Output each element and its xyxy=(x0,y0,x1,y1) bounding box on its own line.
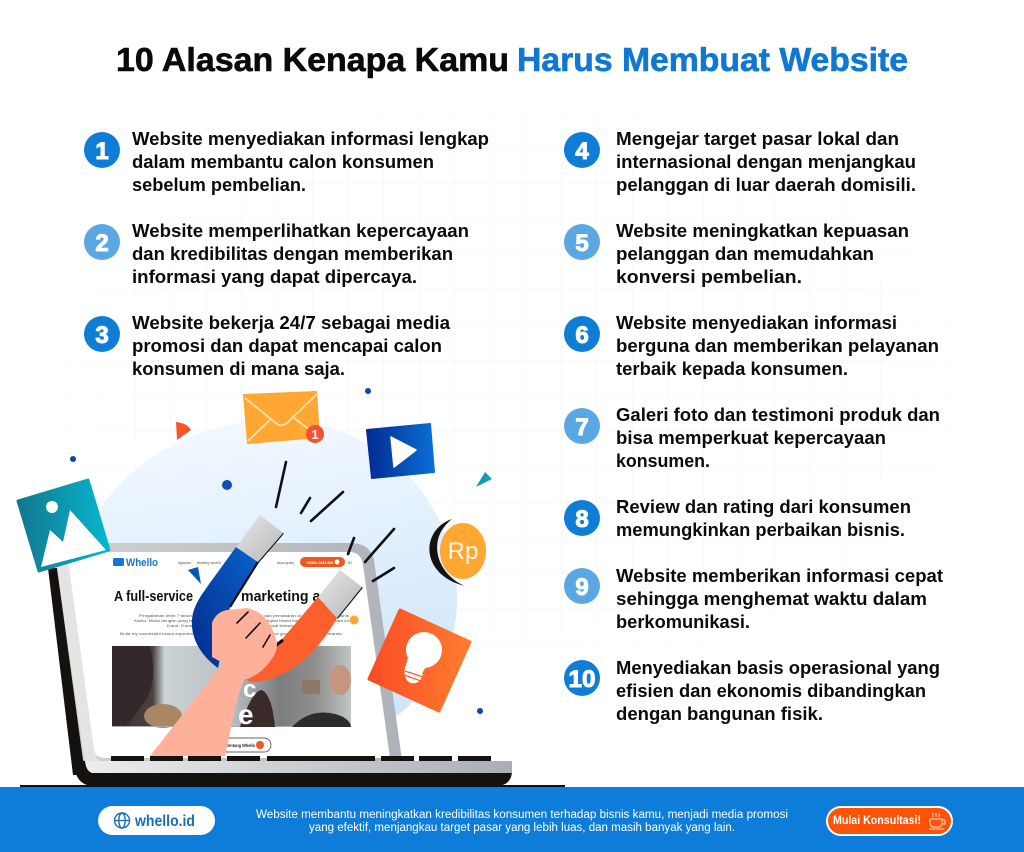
icon: envelope: 1 xyxy=(311,427,319,442)
reason 8: Review dan rating dari konsumen xyxy=(616,497,911,517)
website navigation: baca gratis xyxy=(277,560,294,565)
website photo xyxy=(112,646,351,730)
reason 8: 8 xyxy=(575,506,589,533)
magnet blue arm xyxy=(192,547,258,668)
reason 9: sehingga menghemat waktu dalam xyxy=(616,589,927,609)
icon: play xyxy=(367,424,434,478)
icon: rupiah coin: Rp xyxy=(448,538,478,565)
reason 5: konversi pembelian. xyxy=(616,267,802,287)
reason 4 xyxy=(564,129,916,195)
reason 5: pelanggan dan memudahkan xyxy=(616,244,874,264)
magnet orange tip xyxy=(318,570,362,618)
website heading: A full-service xyxy=(114,589,193,605)
reason 9: berkomunikasi. xyxy=(616,612,750,632)
reason 10: efisien dan ekonomis dibandingkan xyxy=(616,681,926,701)
reason 10: 10 xyxy=(568,666,596,693)
reason 2: 2 xyxy=(95,230,109,257)
illustration: laptop xyxy=(48,543,512,786)
reason 9: Website memberikan informasi cepat xyxy=(616,566,943,586)
reason 6: terbaik kepada konsumen. xyxy=(616,359,848,379)
website navigation: tentang whello xyxy=(197,560,222,565)
website paragraph: Pengalaman lebih 7 tahun di digital marketing, solusi promosi dan pemasaran di masa digital bagi bisnis xyxy=(139,613,349,618)
illustration: magnet rays xyxy=(276,462,394,581)
background grid xyxy=(114,127,906,633)
footer logo pill xyxy=(98,806,215,835)
reason 10 xyxy=(564,658,940,724)
website photo: e xyxy=(238,699,254,730)
reason 3: Website bekerja 24/7 sebagai media xyxy=(132,313,451,333)
laptop base silver xyxy=(85,761,512,773)
footer text xyxy=(256,809,788,834)
reason 4: internasional dengan menjangkau xyxy=(616,152,916,172)
illustration: hand xyxy=(150,608,277,756)
reason 4: Mengejar target pasar lokal dan xyxy=(616,129,899,149)
footer text: yang efektif, menjangkau target pasar yang lebih luas, dan masih banyak yang lain. xyxy=(309,822,735,834)
title xyxy=(116,41,908,78)
icon: envelope xyxy=(244,392,324,443)
reason 3: konsumen di mana saja. xyxy=(132,359,345,379)
reason 3: 3 xyxy=(95,322,109,349)
footer text: Website membantu meningkatkan kredibilitas konsumen terhadap bisnis kamu, menjadi media promosi xyxy=(256,809,788,821)
illustration: ground line xyxy=(20,785,565,787)
website paragraph: Kamu. Mulai dengan yang terbaik dan konsultasikan kebutuhan digital brand kamu bersama kami hari ini xyxy=(134,618,349,623)
reason 8: memungkinkan perbaikan bisnis. xyxy=(616,520,905,540)
decorative shapes xyxy=(70,388,492,714)
icon: rupiah coin xyxy=(429,519,486,586)
reason 6: berguna dan memberikan pelayanan xyxy=(616,336,939,356)
reason 2 xyxy=(84,221,469,287)
reason 5 xyxy=(564,221,909,287)
website button xyxy=(205,738,271,752)
reason 7: konsumen. xyxy=(616,451,710,471)
icon: coffee cup xyxy=(929,813,945,829)
reason 4: pelanggan di luar daerah domisili. xyxy=(616,175,916,195)
website navigation: layanan xyxy=(178,560,191,565)
reason 2: informasi yang dapat dipercaya. xyxy=(132,267,417,287)
reason 1: Website menyediakan informasi lengkap xyxy=(132,129,489,149)
laptop light bezel xyxy=(57,552,105,764)
reason 7: Galeri foto dan testimoni produk dan xyxy=(616,405,940,425)
illustration: background blob xyxy=(100,420,457,715)
website logo: Whello xyxy=(126,557,158,569)
reason 2: dan kredibilitas dengan memberikan xyxy=(132,244,453,264)
website paragraph: Kami. Konsultasi dan solusi yang tepat dan sesuai kebutuhan bisnis xyxy=(167,623,317,628)
reason 1: dalam membantu calon konsumen xyxy=(132,152,434,172)
footer button xyxy=(827,807,952,835)
reason 10: dengan bangunan fisik. xyxy=(616,704,823,724)
reason 7: bisa memperkuat kepercayaan xyxy=(616,428,886,448)
reason 2: Website memperlihatkan kepercayaan xyxy=(132,221,469,241)
illustration: magnet xyxy=(192,515,362,682)
magnet shadow lines xyxy=(230,533,283,607)
footer button: Mulai Konsultasi! xyxy=(833,815,921,827)
magnet orange arm xyxy=(232,597,337,682)
reason 1: sebelum pembelian. xyxy=(132,175,306,195)
footer logo pill: whello.id xyxy=(134,813,195,830)
laptop keys xyxy=(111,756,491,761)
icon: light bulb xyxy=(369,610,470,711)
title: Harus Membuat Website xyxy=(517,41,908,78)
laptop black edge xyxy=(48,568,85,775)
reason 1 xyxy=(84,129,489,195)
reason 6: Website menyediakan informasi xyxy=(616,313,897,333)
website screen xyxy=(67,552,390,758)
reason 8 xyxy=(564,497,911,540)
reason 3 xyxy=(84,313,451,379)
website heading: marketing ag xyxy=(241,589,329,605)
reason 9: 9 xyxy=(575,574,589,601)
icon: image xyxy=(18,480,109,571)
website paragraph xyxy=(120,613,349,636)
website navigation: ID xyxy=(348,560,352,565)
magnet blue tip xyxy=(236,515,283,562)
icon: globe xyxy=(114,813,130,828)
reason 7: 7 xyxy=(575,414,589,441)
laptop base xyxy=(73,752,512,786)
reason 1: 1 xyxy=(95,138,109,165)
reason 6: 6 xyxy=(575,322,589,349)
reason 9 xyxy=(564,566,943,632)
title: 10 Alasan Kenapa Kamu xyxy=(116,41,509,78)
reason 5: Website meningkatkan kepuasan xyxy=(616,221,909,241)
website button: Tentang Whello xyxy=(226,743,255,748)
website paragraph: Build my successful brand experience from start with digital performance and growth solutions for all brands. xyxy=(120,631,343,636)
website heading xyxy=(114,589,329,605)
website navigation: +62821 0435 960 xyxy=(306,560,334,565)
website navigation xyxy=(178,557,352,567)
website photo: c xyxy=(243,676,256,703)
small screen dots xyxy=(188,567,358,624)
reason 3: promosi dan dapat mencapai calon xyxy=(132,336,442,356)
reason 4: 4 xyxy=(575,138,589,165)
reason 7 xyxy=(564,405,940,471)
laptop screen frame xyxy=(56,543,402,772)
footer xyxy=(0,787,1024,852)
reason 5: 5 xyxy=(575,230,589,257)
reason 6 xyxy=(564,313,939,379)
website logo xyxy=(113,557,158,569)
reason 10: Menyediakan basis operasional yang xyxy=(616,658,940,678)
